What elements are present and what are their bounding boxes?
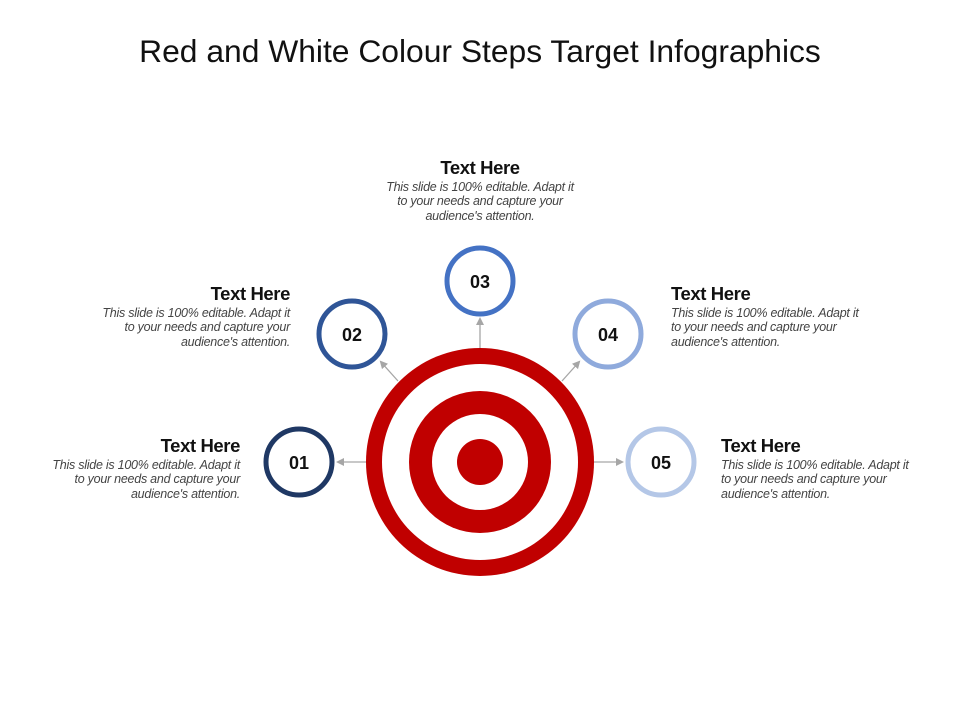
text block 2: [102, 283, 291, 349]
title: Red and White Colour Steps Target Infographics: [139, 33, 821, 69]
step circles: 03: [470, 272, 490, 292]
text block 4: audience's attention.: [671, 335, 780, 349]
text block 5: audience's attention.: [721, 487, 830, 501]
text block 2: This slide is 100% editable. Adapt it: [102, 306, 290, 320]
step circles: 05: [651, 453, 671, 473]
step circles: 01: [289, 453, 309, 473]
text block 1: to your needs and capture your: [74, 472, 240, 486]
text block 5: This slide is 100% editable. Adapt it: [721, 458, 909, 472]
step circles: [266, 248, 694, 495]
arrows: [338, 319, 622, 462]
text block 5: to your needs and capture your: [721, 472, 887, 486]
text block 1: Text Here: [161, 435, 240, 456]
text block 3: to your needs and capture your: [397, 194, 563, 208]
text block 4: [671, 283, 860, 349]
text block 3: This slide is 100% editable. Adapt it: [386, 180, 574, 194]
text block 2: audience's attention.: [181, 335, 290, 349]
text block 4: This slide is 100% editable. Adapt it: [671, 306, 859, 320]
step circles: 02: [342, 325, 362, 345]
text block 4: Text Here: [671, 283, 750, 304]
text block 2: Text Here: [211, 283, 290, 304]
text block 1: This slide is 100% editable. Adapt it: [52, 458, 240, 472]
text block 4: to your needs and capture your: [671, 320, 837, 334]
text block 5: [721, 435, 910, 501]
text block 1: audience's attention.: [131, 487, 240, 501]
text block 1: [52, 435, 241, 501]
text block 3: [386, 157, 574, 223]
text block 2: to your needs and capture your: [124, 320, 290, 334]
step circles: 04: [598, 325, 618, 345]
target: [366, 348, 594, 576]
text block 3: audience's attention.: [425, 209, 535, 223]
text block 3: Text Here: [440, 157, 520, 178]
text block 5: Text Here: [721, 435, 800, 456]
